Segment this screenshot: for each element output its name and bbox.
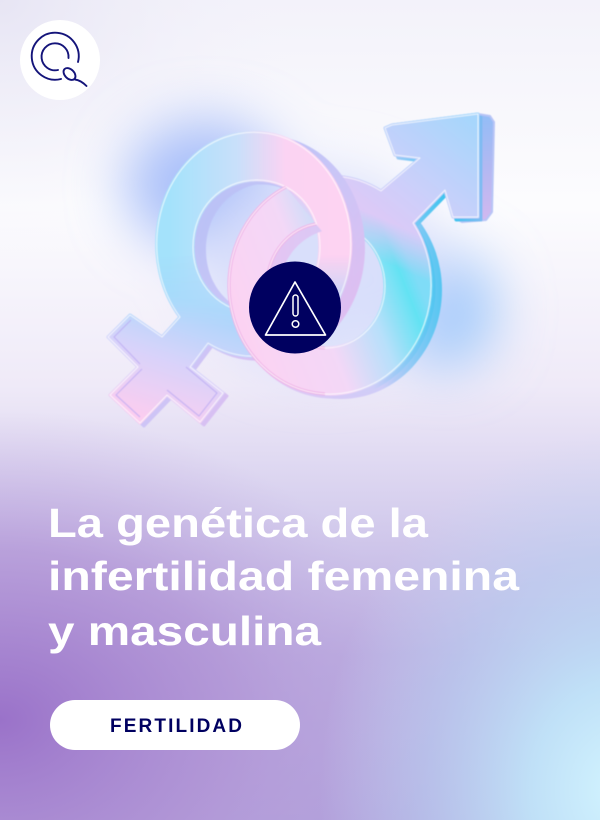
- blue glow behind symbols: [125, 120, 495, 370]
- title: infertilidad femenina: [48, 553, 520, 599]
- icon: interlocked gender symbols: [108, 114, 494, 426]
- icon: warning badge: [249, 262, 341, 354]
- title: La genética de la: [48, 500, 429, 546]
- logo badge: [20, 20, 100, 100]
- category pill: FERTILIDAD: [110, 716, 242, 737]
- title: [48, 500, 520, 654]
- title: y masculina: [48, 608, 322, 654]
- female symbol: [108, 132, 365, 426]
- male ring front section: [227, 186, 325, 396]
- category pill: [50, 700, 300, 750]
- male symbol: [268, 112, 496, 400]
